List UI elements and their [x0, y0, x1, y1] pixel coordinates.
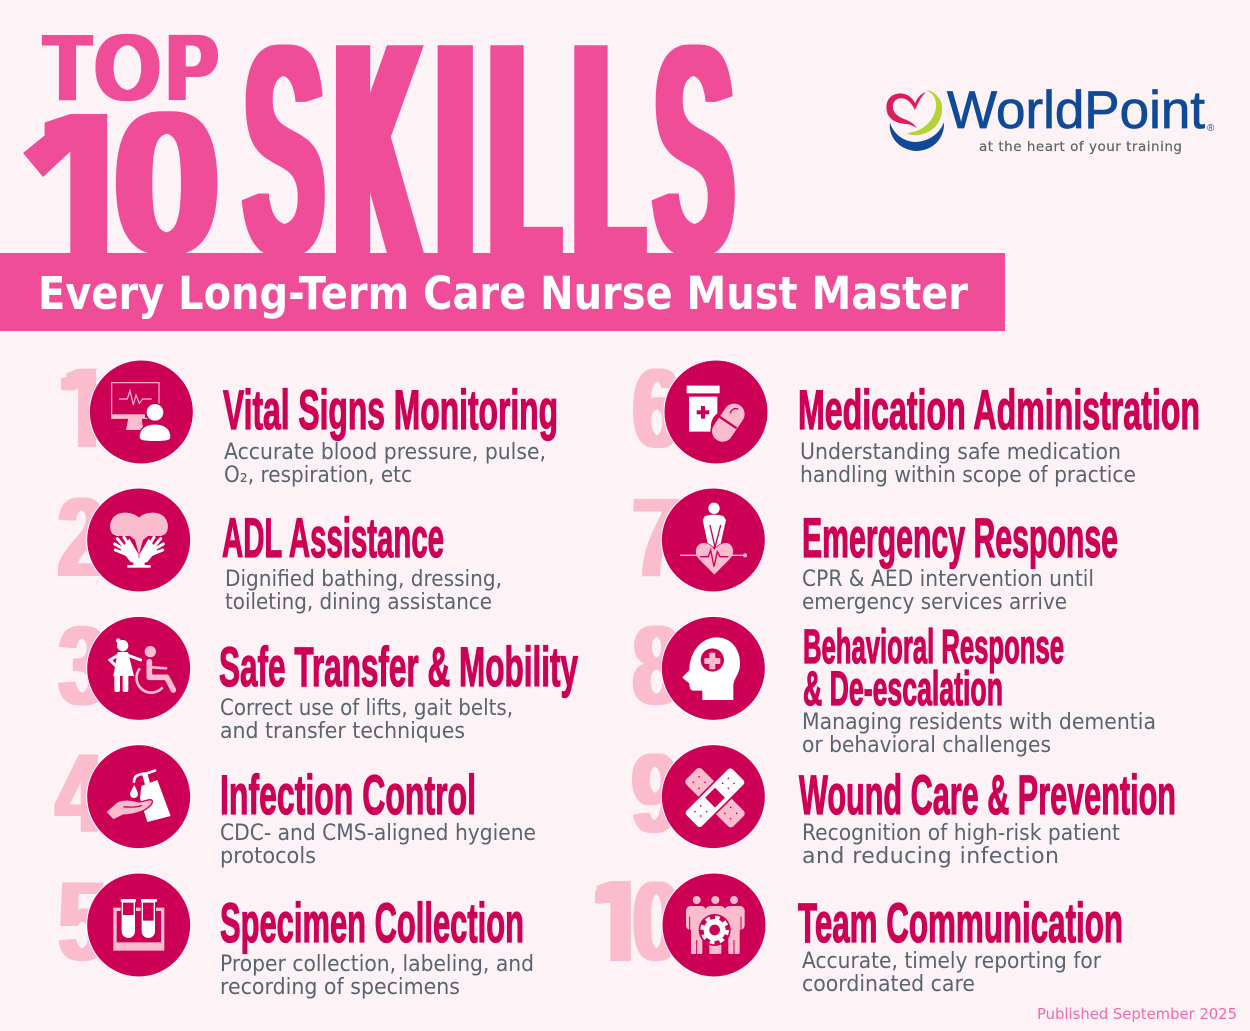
panel: skill 4	[56, 731, 536, 869]
description: O₂, respiration, etc	[224, 463, 412, 488]
description: Proper collection, labeling, and	[220, 952, 534, 977]
title word: SKILLS	[243, 0, 735, 329]
heading: Safe Transfer & Mobility	[219, 635, 578, 698]
number 6: 6	[633, 346, 680, 471]
description: Managing residents with dementia	[802, 710, 1156, 735]
title word: TOP: O	[95, 15, 160, 121]
publication date: Published September 2025	[1037, 1005, 1237, 1023]
description: emergency services arrive	[802, 590, 1067, 615]
description: Understanding safe medication	[800, 440, 1121, 465]
description	[224, 440, 546, 488]
heading: Vital Signs Monitoring	[223, 378, 558, 441]
description: CPR & AED intervention until	[802, 567, 1094, 592]
number 5: 5	[59, 859, 106, 984]
number 4: 4	[56, 731, 103, 856]
description: recording of specimens	[220, 975, 460, 1000]
panel: skill 3	[59, 603, 578, 744]
description	[802, 567, 1094, 615]
description: handling within scope of practice	[800, 463, 1136, 488]
heading: ADL Assistance	[222, 506, 444, 569]
number 2: 2	[58, 475, 105, 600]
icon: heart in hands	[87, 488, 191, 592]
icon: test tubes	[87, 873, 191, 977]
number 10: 1	[590, 854, 647, 1017]
panel: skill 9	[632, 731, 1176, 869]
description	[802, 949, 1102, 997]
description	[802, 710, 1156, 758]
number 3: 3	[59, 603, 106, 728]
description: CDC- and CMS-aligned hygiene	[220, 821, 536, 846]
description	[802, 821, 1120, 869]
panel: skill 2	[58, 475, 502, 615]
banner	[0, 253, 1005, 331]
title word: TOP: P	[167, 15, 218, 121]
description: Accurate, timely reporting for	[802, 949, 1102, 974]
icon: crossed bandages	[661, 745, 765, 849]
panel: skill 1	[61, 360, 556, 486]
description	[220, 952, 534, 1000]
number 1	[61, 368, 96, 447]
number 10: 0	[633, 859, 680, 984]
registered mark: ®	[1207, 123, 1215, 134]
description: or behavioral challenges	[802, 733, 1051, 758]
description	[220, 696, 513, 744]
panel: skill 6	[633, 346, 1200, 488]
heading: Infection Control	[220, 763, 476, 826]
logo mark: heart	[886, 90, 944, 151]
title number: 10: 1	[33, 66, 138, 346]
heading	[803, 621, 1064, 716]
icon: caregiver and wheelchair	[87, 616, 191, 720]
panel: skill 8	[633, 603, 1156, 758]
panel: skill 7	[633, 475, 1118, 615]
logo tagline: at the heart of your training	[979, 139, 1182, 155]
letters S and S	[243, 0, 735, 318]
logo: WorldPoint	[886, 81, 1215, 155]
number 7: 7	[633, 475, 680, 600]
title word: TOP	[44, 15, 218, 121]
description: Accurate blood pressure, pulse,	[224, 440, 546, 465]
icon: team and gear	[662, 873, 766, 977]
icon: monitor and patient	[89, 360, 193, 464]
icon: CPR and heartbeat	[661, 488, 765, 592]
description: and reducing infection	[802, 844, 1059, 869]
icon: head with medical cross	[661, 616, 765, 720]
title number: 10: 0	[113, 70, 220, 297]
icon: sanitizer and hand	[87, 745, 191, 849]
description: protocols	[220, 844, 316, 869]
description: toileting, dining assistance	[225, 590, 492, 615]
number 1: 1	[62, 342, 109, 499]
description	[220, 821, 536, 869]
description: Correct use of lifts, gait belts,	[220, 696, 513, 721]
heading: Specimen Collection	[220, 891, 524, 954]
number 9: 9	[632, 731, 679, 856]
icon: medicine bottle and capsule	[664, 360, 768, 464]
description: coordinated care	[802, 972, 975, 997]
panel: skill 5	[59, 859, 534, 1000]
description: Dignified bathing, dressing,	[225, 567, 502, 592]
description	[800, 440, 1136, 488]
description: and transfer techniques	[220, 719, 465, 744]
number 10	[595, 881, 674, 961]
panel: skill 10	[595, 872, 1122, 992]
subtitle: Every Long-Term Care Nurse Must Master	[38, 267, 969, 320]
title word: TOP: T	[44, 15, 91, 121]
heading: & De-escalation	[803, 663, 1003, 716]
logo wordmark: WorldPoint	[947, 81, 1205, 140]
description: Recognition of high-risk patient	[802, 821, 1120, 846]
number 8: 8	[633, 603, 680, 728]
description	[225, 567, 502, 615]
title: Top 10 Skills	[23, 0, 735, 346]
